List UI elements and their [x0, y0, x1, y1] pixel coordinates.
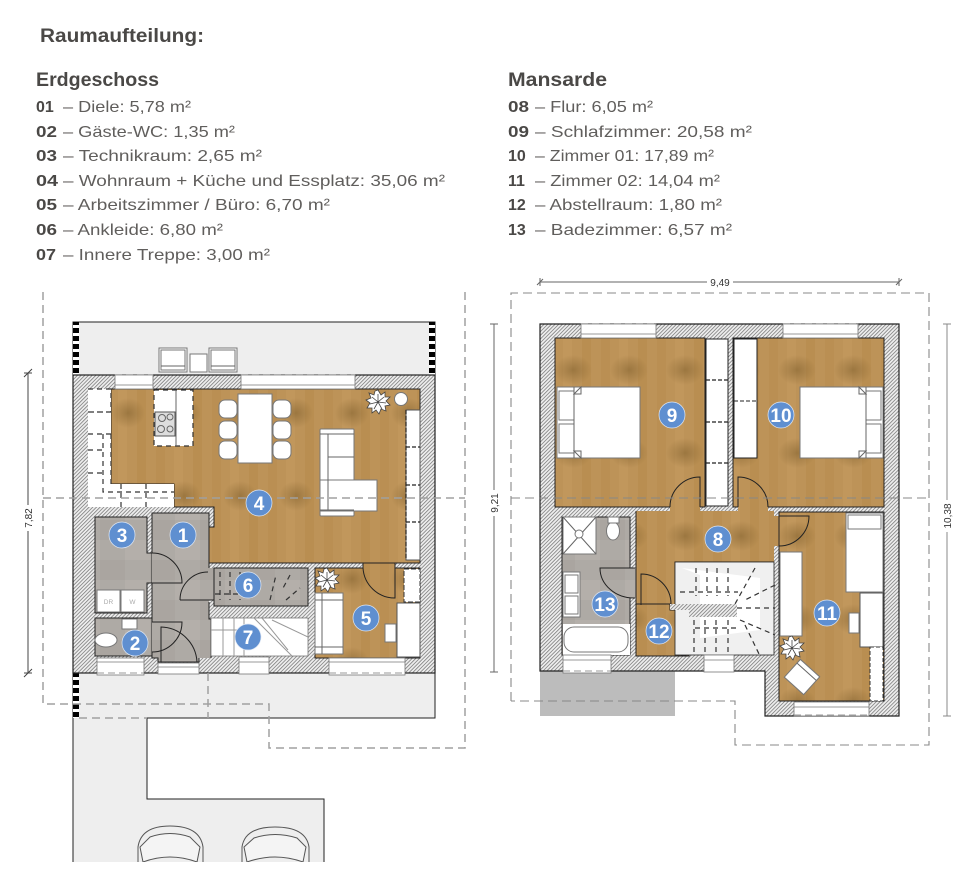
dimension 9,21	[490, 324, 501, 672]
heading: Mansarde: Mansarde	[508, 70, 607, 91]
marker 13	[592, 591, 618, 617]
list item 04: – Wohnraum + Küche und Essplatz: 35,06 m²	[63, 173, 446, 190]
room 11: bedroom	[779, 512, 884, 701]
list item 10: 10	[508, 148, 526, 165]
list item 13: 13	[508, 222, 526, 239]
room 4: living room with kitchen and dining	[88, 389, 420, 563]
dimension 9,49	[537, 278, 902, 289]
room 6: dressing room	[214, 568, 308, 606]
list item 08: 08	[508, 99, 529, 116]
list item 02: – Gäste-WC: 1,35 m²	[63, 124, 236, 141]
room 7: inner stairs	[211, 618, 308, 656]
marker 12: 12	[648, 622, 670, 643]
marker 1	[170, 522, 196, 548]
marker 4: 4	[254, 494, 265, 515]
dimension 7,82: 7,82	[24, 508, 35, 528]
marker 11: 11	[817, 604, 837, 625]
parked cars	[138, 826, 310, 862]
list item 12: 12	[508, 197, 526, 214]
inner stairs	[670, 562, 775, 656]
marker 5	[353, 605, 379, 631]
marker 9: 9	[667, 406, 677, 427]
list item 05: 05	[36, 197, 57, 214]
marker 4	[246, 490, 272, 516]
marker 7: 7	[243, 628, 253, 649]
list item 13: – Badezimmer: 6,57 m²	[535, 222, 733, 239]
list item 07: – Innere Treppe: 3,00 m²	[63, 247, 271, 264]
marker 2: 2	[130, 634, 140, 655]
list item 01: – Diele: 5,78 m²	[63, 99, 192, 116]
marker 6: 6	[243, 576, 253, 597]
room 3: technical room	[95, 517, 152, 613]
room 9: bedroom	[555, 338, 728, 507]
dimension 9,21: 9,21	[490, 493, 501, 513]
floor plan: Mansarde	[490, 278, 954, 745]
windows and doors	[97, 375, 405, 675]
sloped roof area	[540, 671, 675, 716]
list item 06: – Ankleide: 6,80 m²	[63, 222, 224, 239]
marker 2	[122, 630, 148, 656]
room 10: bedroom	[733, 338, 884, 507]
dashed building outline	[43, 292, 465, 748]
marker 11	[814, 600, 840, 626]
list item 11: 11	[508, 173, 525, 190]
dimension 9,49: 9,49	[710, 278, 730, 289]
room list: Mansarde	[508, 70, 753, 239]
dimension 10,38	[943, 324, 954, 716]
list item 09: – Schlafzimmer: 20,58 m²	[535, 124, 753, 141]
list item 06: 06	[36, 222, 57, 239]
marker 8	[705, 526, 731, 552]
list item 10: – Zimmer 01: 17,89 m²	[535, 148, 715, 165]
terrace	[73, 322, 435, 375]
heading: Erdgeschoss: Erdgeschoss	[36, 70, 159, 91]
list item 01: 01	[36, 99, 54, 116]
dashed building outline	[511, 293, 929, 745]
marker 5: 5	[361, 609, 372, 630]
building walls	[73, 375, 435, 673]
marker 10	[768, 402, 794, 428]
marker 7	[235, 624, 261, 650]
dimension 10,38: 10,38	[943, 503, 954, 529]
room 3: technical room: DR	[104, 599, 113, 606]
room 8: corridor	[636, 505, 780, 604]
marker 12	[646, 618, 672, 644]
room list: Erdgeschoss	[36, 70, 446, 264]
list item 05: – Arbeitszimmer / Büro: 6,70 m²	[63, 197, 331, 214]
marker 1: 1	[178, 526, 189, 547]
list item 07: 07	[36, 247, 56, 264]
room 1: hall	[152, 513, 214, 662]
list item 02: 02	[36, 124, 57, 141]
dimension 7,82	[24, 369, 35, 677]
marker 3	[109, 522, 135, 548]
marker 3: 3	[117, 526, 127, 547]
marker 13: 13	[594, 595, 616, 616]
room 3: technical room: W	[129, 599, 136, 606]
marker 8: 8	[713, 530, 723, 551]
marker 9	[659, 402, 685, 428]
room 2: guest WC	[95, 618, 152, 656]
building walls	[540, 324, 899, 716]
list item 11: – Zimmer 02: 14,04 m²	[535, 173, 721, 190]
list item 03: 03	[36, 148, 57, 165]
driveway and parking	[73, 673, 435, 862]
room 12: storage	[636, 604, 689, 656]
list item 09: 09	[508, 124, 529, 141]
marker 10: 10	[770, 406, 792, 427]
marker 6	[235, 572, 261, 598]
list item 03: – Technikraum: 2,65 m²	[63, 148, 263, 165]
windows and doors	[563, 324, 869, 716]
room 5: office	[315, 563, 420, 658]
list item 08: – Flur: 6,05 m²	[535, 99, 654, 116]
title: Raumaufteilung:	[40, 26, 204, 47]
list item 04: 04	[36, 173, 58, 190]
room 13: bathroom	[562, 517, 636, 655]
list item 12: – Abstellraum: 1,80 m²	[535, 197, 723, 214]
floor plan: Erdgeschoss	[24, 292, 465, 870]
